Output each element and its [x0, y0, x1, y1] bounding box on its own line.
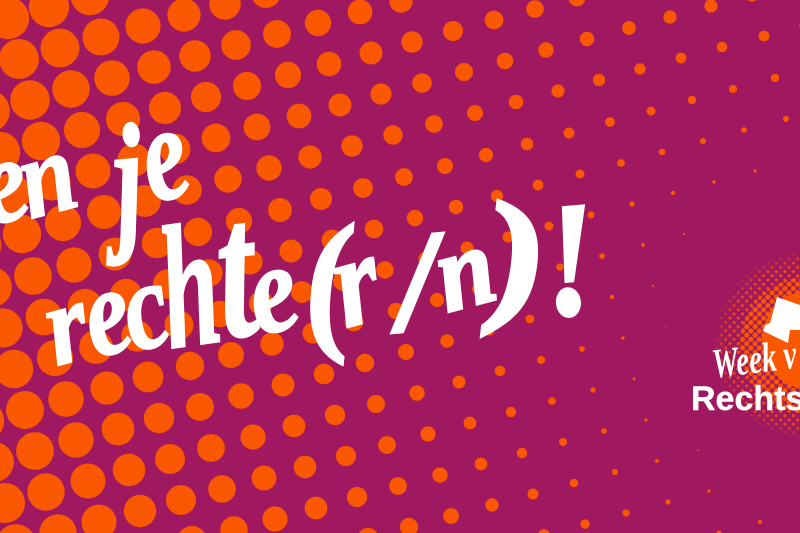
- line two: rechte(r/n)!: n: [422, 203, 507, 335]
- line two: rechte(r/n)!: !: [537, 168, 602, 350]
- line two: rechte(r/n)!: t: [206, 160, 268, 379]
- line two: rechte(r/n)!: e: [66, 240, 145, 385]
- logo script text: Week v: [709, 331, 800, 387]
- line one: en je: [0, 75, 204, 267]
- line one: en je: n: [4, 107, 89, 244]
- headline lettering: [0, 75, 602, 390]
- line two: rechte(r/n)!: ): [469, 169, 554, 336]
- line two: rechte(r/n)!: e: [230, 217, 313, 363]
- line two: rechte(r/n)!: c: [105, 234, 184, 379]
- line one: en je: j: [92, 92, 151, 267]
- icon: gavel: [763, 297, 800, 343]
- line two: rechte(r/n)!: r: [315, 205, 397, 356]
- line two: rechte(r/n)!: /: [381, 202, 454, 362]
- line two: rechte(r/n)!: (: [294, 193, 366, 369]
- line two: rechte(r/n)!: [30, 160, 602, 390]
- line two: rechte(r/n)!: r: [30, 256, 103, 390]
- line one: en je: e: [122, 75, 204, 232]
- line two: rechte(r/n)!: h: [148, 186, 230, 386]
- halftone burst: [716, 253, 800, 438]
- logo: Week van de Rechtspraak: [693, 253, 800, 438]
